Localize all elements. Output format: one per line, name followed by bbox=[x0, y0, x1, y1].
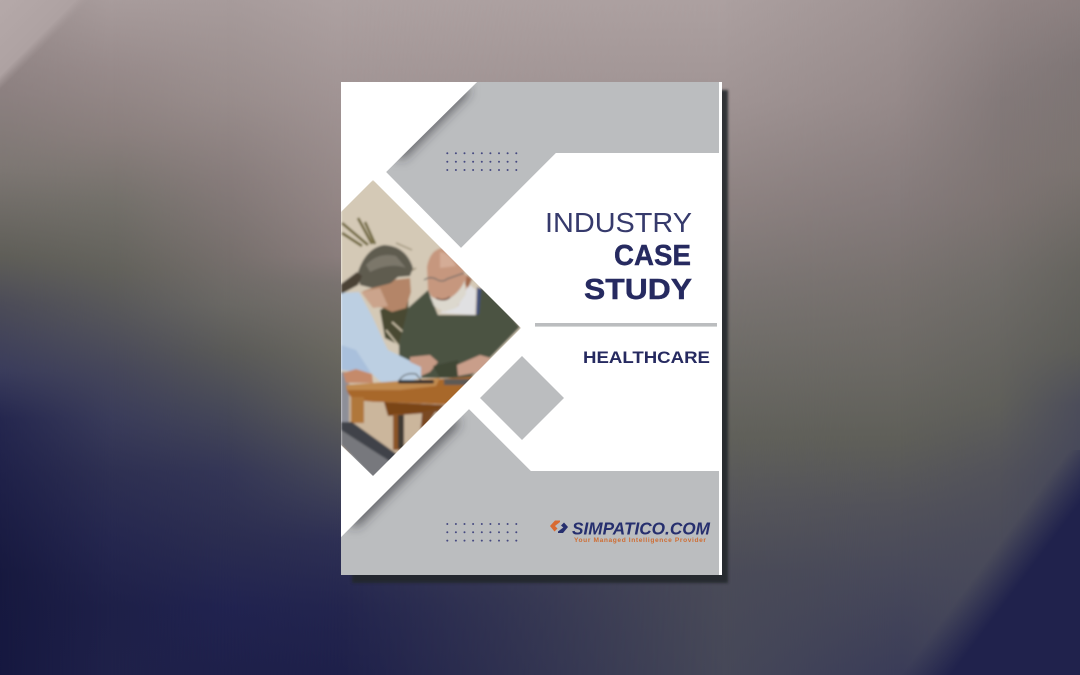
woman: shirt bbox=[341, 292, 423, 382]
logo: Simpatico.com bbox=[550, 518, 710, 544]
cover page bbox=[341, 82, 722, 575]
page shadow bbox=[352, 90, 728, 583]
woman: hair bbox=[358, 245, 413, 288]
page sheet bbox=[341, 82, 722, 575]
wall bbox=[341, 180, 521, 420]
dots: top bbox=[446, 152, 517, 171]
divider bbox=[535, 323, 717, 327]
man: head bbox=[426, 248, 468, 300]
title: STUDY bbox=[584, 274, 692, 306]
panel: top grey shape bbox=[386, 82, 719, 248]
title: INDUSTRY bbox=[545, 207, 692, 238]
logo tagline: Your Managed Intelligence Provider bbox=[574, 537, 706, 544]
subtitle: healthcare: HEALTHCARE bbox=[583, 349, 710, 367]
photo: two people talking at a table bbox=[341, 180, 521, 478]
title bbox=[545, 207, 692, 306]
panel: bottom grey shape bbox=[341, 409, 719, 575]
title: CASE bbox=[614, 240, 691, 272]
dots: bottom bbox=[446, 523, 517, 542]
small grey diamond bbox=[480, 356, 564, 440]
table bbox=[346, 376, 480, 405]
floor and dark seat bbox=[341, 422, 398, 463]
hands and sleeve bbox=[410, 355, 438, 376]
logo wordmark: SIMPATICO.COM bbox=[572, 518, 710, 538]
icon: logo chevrons bbox=[550, 520, 568, 533]
man: sweater bbox=[399, 287, 520, 378]
plant bbox=[342, 218, 375, 246]
woman: neck and face bbox=[363, 278, 411, 312]
items on table bbox=[398, 380, 434, 384]
table legs bbox=[351, 397, 364, 423]
